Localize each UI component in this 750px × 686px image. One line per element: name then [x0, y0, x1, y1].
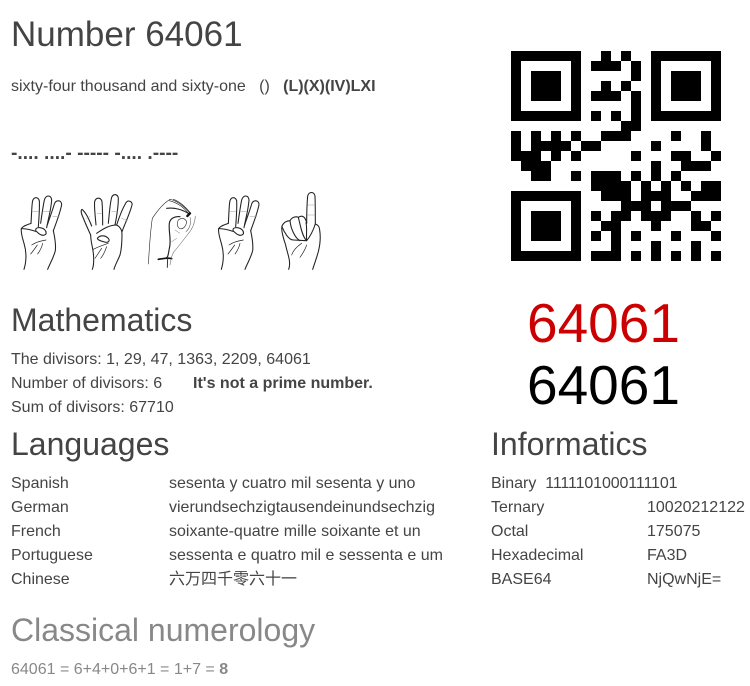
informatics table: NjQwNjE=: [647, 570, 721, 588]
informatics table: Octal: [491, 522, 528, 540]
number of divisors: Number of divisors: 6: [11, 374, 162, 392]
hand: one: [282, 192, 320, 269]
sign language hands: [20, 192, 321, 270]
hand: six: [219, 196, 259, 269]
number in words and roman numeral: sixty-four thousand and sixty-one () (L)(X)(IV)LXI: [11, 78, 376, 95]
informatics table: 10020212122: [647, 498, 745, 516]
languages table: German: [11, 498, 69, 516]
languages table: Spanish: [11, 474, 69, 492]
QR code: [511, 51, 721, 261]
hand: six: [21, 196, 62, 269]
languages table: vierundsechzigtausendeinundsechzig: [169, 498, 435, 516]
languages table: [11, 474, 443, 588]
divisors: The divisors: 1, 29, 47, 1363, 2209, 64061: [11, 350, 311, 368]
prime note: It's not a prime number.: [193, 374, 373, 392]
black number: 64061: [527, 354, 680, 416]
hand: zero: [148, 199, 195, 267]
numerology calculation: 64061 = 6+4+0+6+1 = 1+7 = 8: [11, 660, 228, 678]
hand: four: [81, 195, 132, 269]
languages table: sesenta y cuatro mil sesenta y uno: [169, 474, 415, 492]
informatics table: Binary 1111101000111101: [491, 474, 677, 492]
heading: informatics: Informatics: [491, 426, 647, 462]
informatics table: Hexadecimal: [491, 546, 583, 564]
heading: classical numerology: Classical numerology: [11, 612, 315, 648]
informatics table: BASE64: [491, 570, 551, 588]
languages table: 六万四千零六十一: [169, 570, 297, 588]
heading: languages: Languages: [11, 426, 169, 462]
title: Number 64061: [11, 15, 243, 54]
sum of divisors: Sum of divisors: 67710: [11, 398, 174, 416]
languages table: Chinese: [11, 570, 70, 588]
heading: mathematics: Mathematics: [11, 302, 192, 338]
informatics table: 175075: [647, 522, 700, 540]
informatics table: [491, 474, 745, 588]
informatics table: FA3D: [647, 546, 687, 564]
informatics table: Ternary: [491, 498, 544, 516]
languages table: sessenta e quatro mil e sessenta e um: [169, 546, 443, 564]
red number: 64061: [527, 292, 680, 354]
morse code: -.... ....- ----- -.... .----: [11, 143, 178, 164]
languages table: Portuguese: [11, 546, 93, 564]
languages table: French: [11, 522, 61, 540]
languages table: soixante-quatre mille soixante et un: [169, 522, 421, 540]
